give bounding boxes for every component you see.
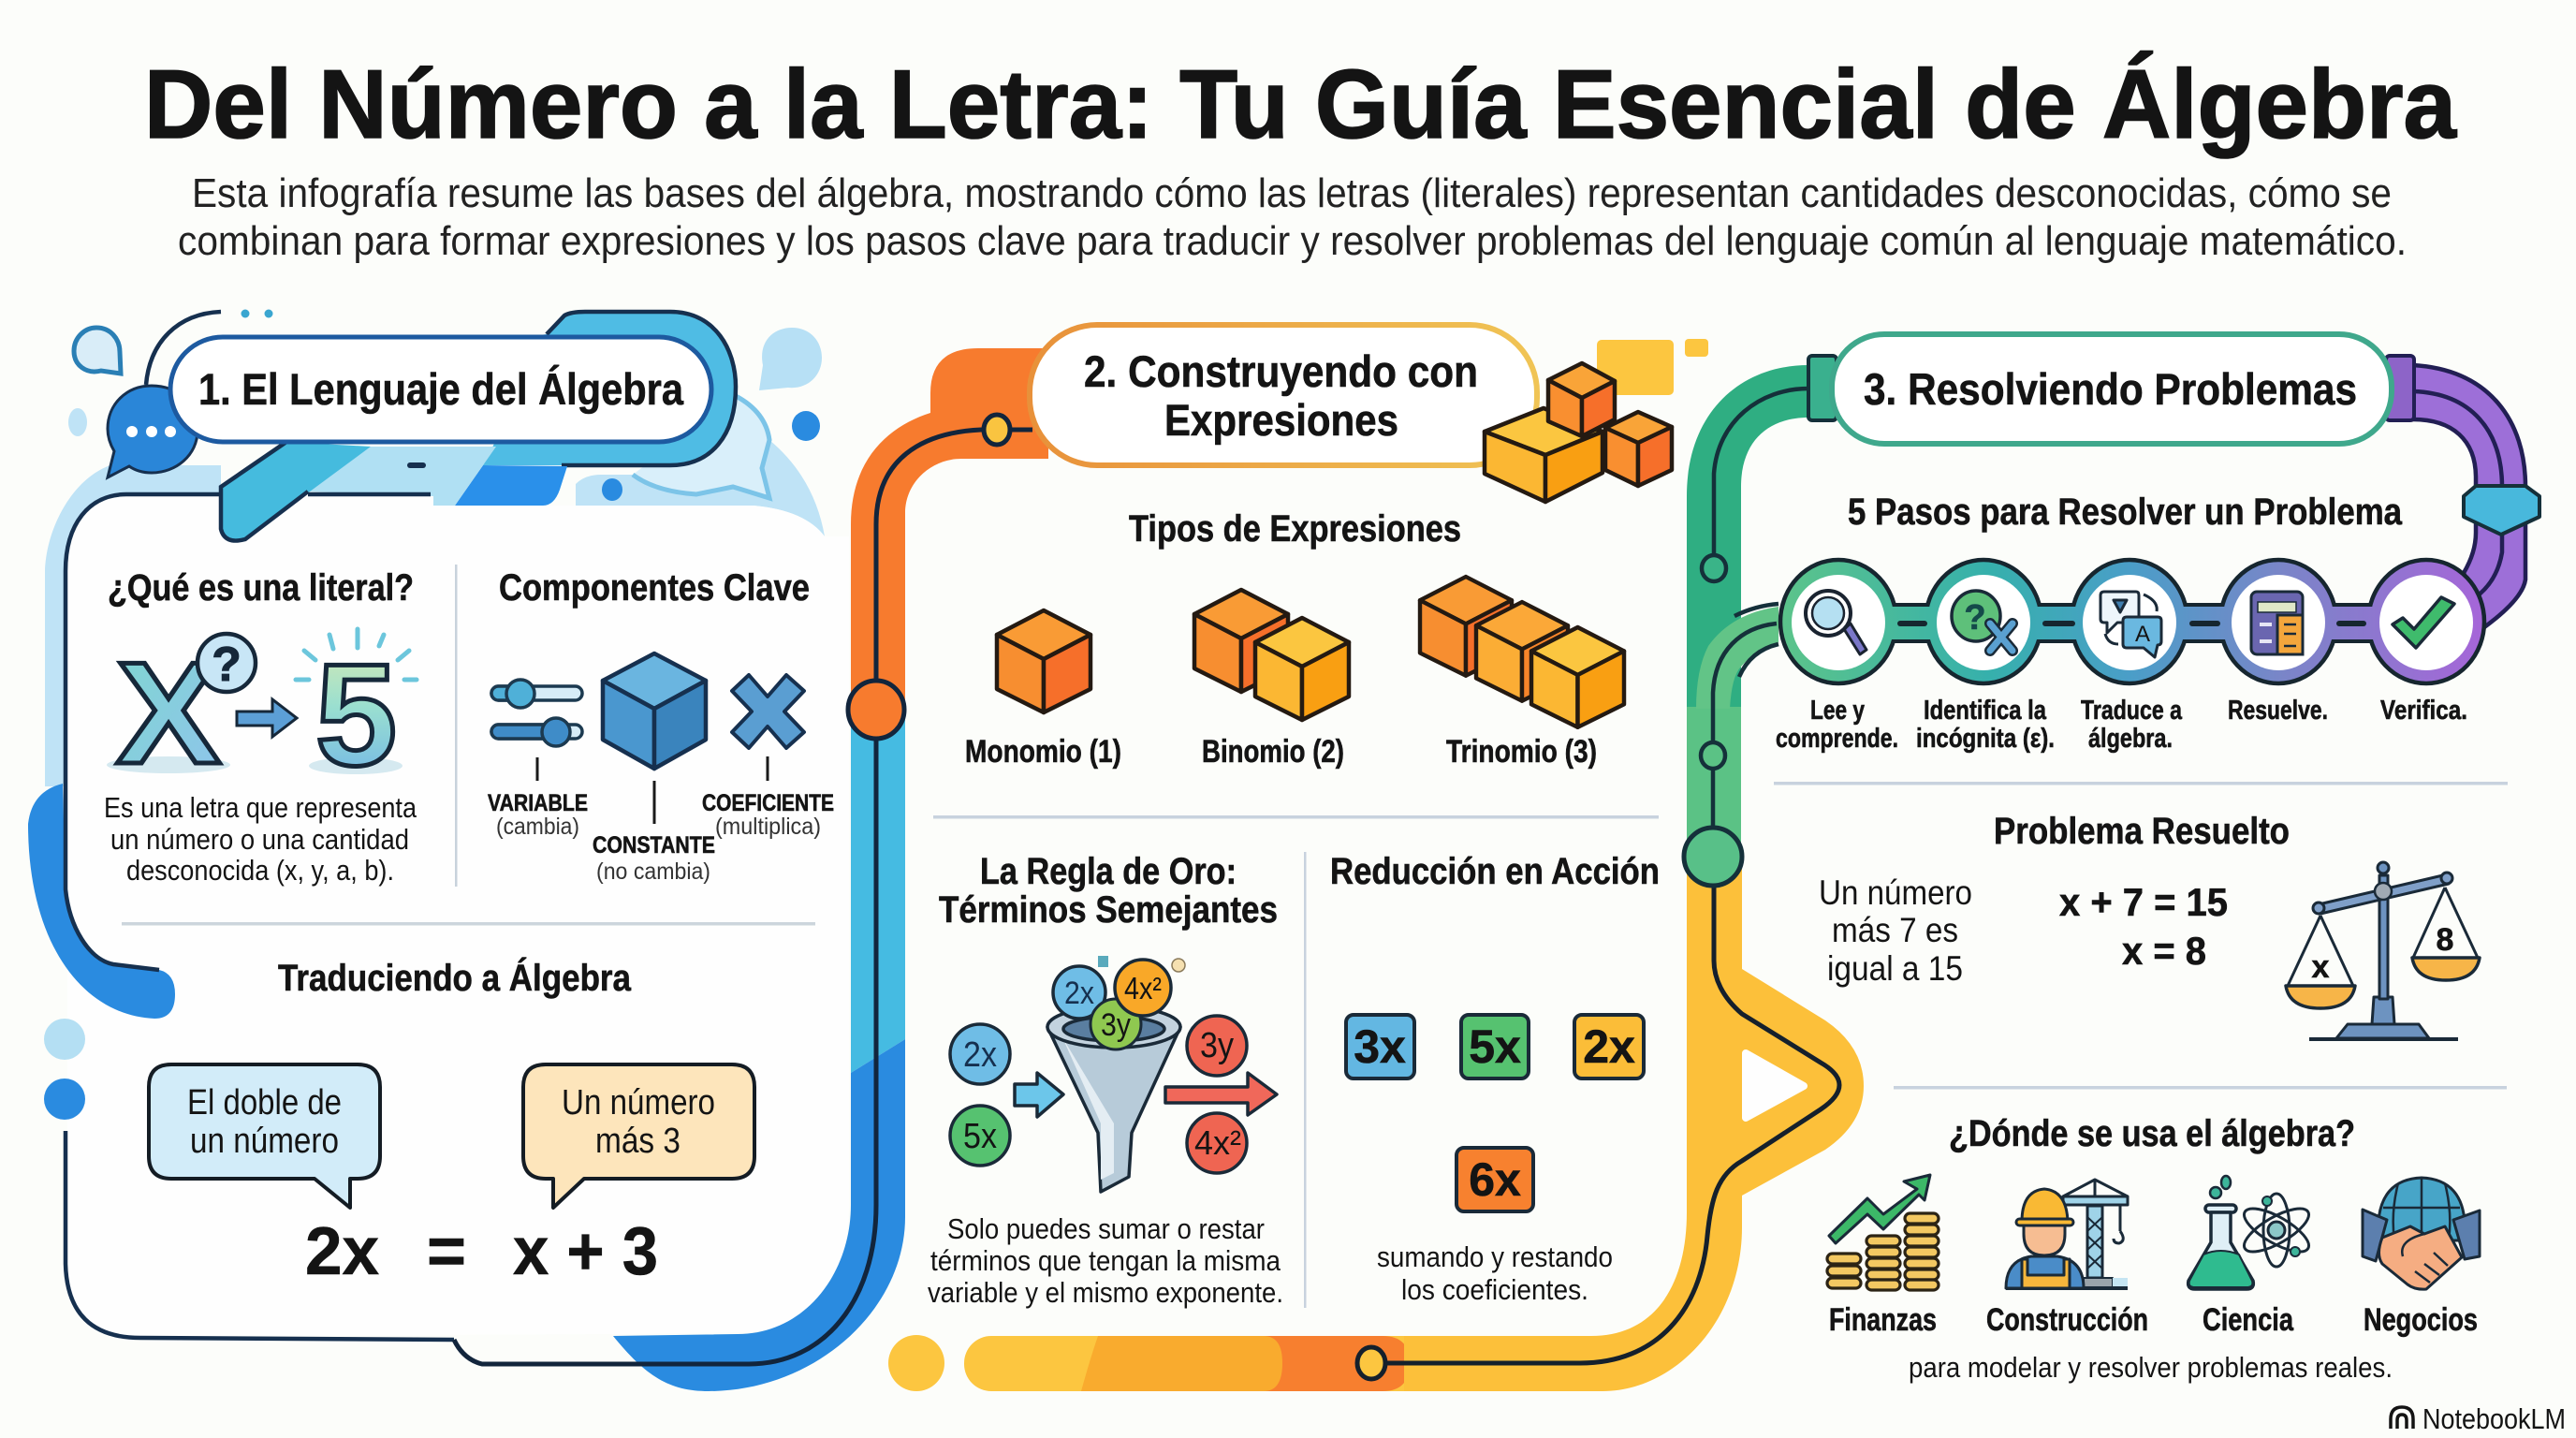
panel outline lower [66,1131,454,1340]
tile 3x: 3x [1354,1020,1406,1073]
tile 6x: 6x [1469,1153,1521,1206]
orange segment [851,348,1048,721]
right cap [2386,356,2414,420]
text: rule explanation [928,1212,1283,1309]
icon: globe handshake [2363,1178,2480,1289]
text: problem statement: más 7 es [1832,911,1958,949]
icon: check mark [2393,597,2454,648]
tile 2x [1574,1015,1644,1078]
illustration: x to 5: ? [212,638,242,692]
illustration: x to 5: X [116,632,221,794]
equation steps: x + 7 = 15 [2059,880,2228,924]
step 1 label [1776,696,1898,754]
speech bubble: doble [149,1064,380,1208]
small node [984,415,1010,445]
heading: cinco pasos: 5 Pasos para Resolver un Problema [1848,492,2403,533]
text: problem statement: Un número [1819,873,1972,912]
tile 3x [1346,1015,1414,1078]
term circle 5x: 5x [963,1117,997,1156]
equation: = [427,1214,466,1289]
text: definition of literal [104,791,417,887]
step 2 label: Identifica la [1924,696,2047,726]
text: definition of literal: desconocida (x, y, a, b). [126,854,394,887]
icon: finance coins [1827,1175,1939,1290]
term circle 3y [1187,1016,1247,1076]
heading: tipos: Tipos de Expresiones [1129,508,1461,550]
panel: resolviendo problemas [1774,334,2508,1384]
blue fold [455,465,567,506]
label: construccion: Construcción [1986,1302,2148,1338]
icon: science flask and atom [2188,1176,2315,1289]
text: rule explanation: variable y el mismo exponente. [928,1276,1283,1309]
step 2 label [1916,696,2055,754]
tile 5x [1461,1015,1529,1078]
label: coeficiente: COEFICIENTE [702,790,834,816]
label: ciencia: Ciencia [2203,1302,2294,1338]
icon: cube constant [603,653,706,769]
ring interiors [1792,575,2473,670]
connector fills [1872,607,2396,639]
step 5 label: Verifica. [2380,696,2467,726]
end dot [888,1335,944,1391]
icon: question and x: ? [1964,598,1986,638]
tile 5x: 5x [1469,1020,1521,1073]
label: variable: (cambia) [496,814,579,840]
step 4 label: Resuelve. [2228,696,2328,726]
heading: que es una literal: ¿Qué es una literal? [108,567,414,609]
step 3 label: álgebra. [2088,724,2173,754]
ribbon: yellow [888,857,1864,1391]
heading: componentes clave: Componentes Clave [499,567,810,609]
ribbon body [483,312,736,465]
label: binomio: Binomio (2) [1202,734,1344,770]
icon: translate bubbles: A [2135,622,2150,647]
speech bubble: mas 3: Un número [562,1083,715,1123]
text: problem statement: igual a 15 [1827,949,1963,988]
text: definition of literal: Es una letra que representa [104,791,417,824]
ribbon: orange to blue [454,348,1048,1391]
section heading pill: Expresiones [1164,395,1398,445]
lower node [1701,742,1725,769]
tail outline [221,442,308,541]
label: coeficiente: (multiplica) [715,814,821,840]
section heading pill [170,337,711,442]
icon: outline bubble right [633,396,769,498]
yellow centre line [1385,886,1839,1363]
term circle 4x2: 4x² [1194,1123,1241,1162]
clamp [2464,486,2539,535]
intro paragraph: combinan para formar expresiones y los pasos clave para traducir y resolver problemas del lenguaje común al lenguaje matemático. [178,218,2407,264]
icon: funnel [1047,1006,1180,1192]
decorative circles [44,1019,85,1120]
panel: el lenguaje del algebra [28,309,849,1340]
text: rule explanation: términos que tengan la misma [930,1244,1281,1277]
scale label 8: 8 [2437,922,2453,958]
illustration: x to 5 [107,629,417,796]
light cloud left [45,465,221,786]
scale label x: x [2312,949,2330,985]
small node [1357,1347,1385,1379]
intro paragraph: Esta infografía resume las bases del álgebra, mostrando cómo las letras (literales) representan cantidades desconocidas, cómo se [192,170,2392,216]
bar orange [1264,1336,1410,1391]
speech bubble: doble: un número [190,1122,339,1161]
label: finanzas: Finanzas [1829,1302,1937,1338]
icon: question and x [1952,591,2012,651]
connector bar [1838,605,2426,641]
step chain [1780,560,2484,683]
divider [1774,782,2508,785]
green trunk lower [1687,707,1741,858]
icon: monomio cube [997,610,1090,712]
label: constante: CONSTANTE [593,832,715,858]
header arc [146,312,221,385]
section heading pill [1832,334,2392,444]
illustration: x to 5: 5 [315,634,397,796]
ribbon: green [1684,356,1837,886]
term circle 2x [950,1024,1010,1084]
panel white fill [67,496,849,1336]
funnel balls: 3y [1101,1007,1131,1043]
light dot [68,408,87,436]
section heading pill [1030,325,1537,465]
light cloud right [576,440,825,536]
equation steps [2059,880,2228,973]
branch outline [1713,604,1778,742]
speech bubble: mas 3 [523,1064,754,1208]
light fold [308,447,496,506]
icon: calculator [2251,592,2303,654]
icon: construction worker [2006,1180,2128,1288]
purple pipe [2413,365,2525,627]
panel outline [66,494,221,970]
label: trinomio: Trinomio (3) [1446,734,1597,770]
header dots [242,309,273,318]
green lines [1713,389,1808,828]
tail [221,442,371,541]
step 3 label [2081,696,2183,754]
text: reduction note [1377,1240,1613,1306]
header ribbon [221,312,736,541]
text: reduction note: sumando y restando [1377,1240,1613,1273]
left cap [1808,356,1837,420]
arrow: out of funnel [1165,1073,1277,1115]
funnel balls [1053,956,1185,1049]
speech bubble: mas 3: más 3 [595,1122,681,1161]
cyan segment [851,712,905,1073]
label: constante: (no cambia) [596,858,710,885]
heading: reduccion: Reducción en Acción [1330,851,1660,892]
heading: donde se usa: ¿Dónde se usa el álgebra? [1949,1113,2355,1154]
large node [1684,828,1742,886]
decorative dots [602,411,820,501]
large node [848,681,904,739]
equation: 2x [305,1214,379,1289]
blue ribbon left [28,784,175,1019]
step 1 label: comprende. [1776,724,1898,754]
icon: binomio cubes [1194,590,1349,720]
blue segment [613,1039,905,1391]
label: variable [488,790,588,840]
panel: construyendo con expresiones [928,325,1708,1309]
speech bubble: doble: El doble de [187,1083,342,1123]
vertical divider [455,565,457,887]
vertical divider [1304,852,1307,1308]
term circle 5x [950,1106,1010,1166]
text: reduction note: los coeficientes. [1401,1273,1588,1306]
step 3 label: Traduce a [2081,696,2183,726]
arrow: into funnel [1015,1073,1063,1117]
label: coeficiente [702,790,834,840]
icon: sliders [491,680,582,746]
pipe centre [2413,391,2502,596]
decorative squares [1597,339,1708,395]
divider [122,922,815,925]
label: monomio: Monomio (1) [965,734,1121,770]
heading: traduciendo: Traduciendo a Álgebra [278,957,632,999]
connector dashes [1900,621,2364,626]
ribbon: purple [2386,356,2539,627]
term circle 3y: 3y [1200,1026,1234,1065]
panel top line right [308,492,431,496]
section heading pill: 1. El Lenguaje del Álgebra [198,364,684,414]
text: rule explanation: Solo puedes sumar o restar [947,1212,1265,1245]
icon: multiply cross [732,675,804,748]
funnel balls: 4x² [1124,971,1162,1005]
step 1 label: Lee y [1810,696,1865,726]
bar mid [1081,1336,1282,1391]
section heading pill: 3. Resolviendo Problemas [1864,364,2357,414]
upper node [1702,555,1726,581]
equation: x + 3 [513,1214,658,1289]
text: definition of literal: un número o una cantidad [110,823,409,856]
equation [305,1214,658,1289]
tile 6x [1456,1148,1533,1211]
heading: regla de oro: Términos Semejantes [939,889,1278,931]
step 2 label: incógnita (ε). [1916,724,2055,754]
icon: translate bubbles [2100,592,2161,657]
icon: light bubble right [759,328,822,390]
funnel balls: 2x [1064,976,1094,1011]
bar light [964,1336,1432,1391]
label: constante [593,832,715,885]
small dash [407,462,426,468]
term circle 2x: 2x [963,1035,997,1075]
icon: magnifier [1806,591,1866,654]
green branch [1696,607,1778,709]
icon: chat bubble [108,386,198,477]
heading: regla de oro [939,851,1278,931]
white triangle notch [1746,1053,1804,1118]
rings [1780,560,2484,683]
ribbon outline [547,312,736,465]
component leader lines [537,756,768,824]
icon: trinomio cubes [1420,577,1624,727]
heading: problema resuelto: Problema Resuelto [1994,811,2290,852]
label: variable: VARIABLE [488,790,588,816]
equation steps: x = 8 [2122,929,2206,973]
icon: stacked cubes [1485,363,1672,502]
divider [1894,1086,2507,1090]
icon: small outline bubble [74,328,121,374]
tile 2x: 2x [1583,1020,1635,1073]
intro paragraph [178,170,2407,264]
text: problem statement [1819,873,1972,988]
centre line [454,430,1032,1364]
label: negocios: Negocios [2364,1302,2478,1338]
title: Del Número a la Letra: Tu Guía Esencial de Álgebra [144,51,2457,159]
term circle 4x2 [1187,1113,1247,1173]
divider [933,815,1659,818]
yellow band with bump [1404,857,1864,1391]
section heading pill: 2. Construyendo con [1084,346,1478,396]
green trunk [1687,365,1808,712]
heading: regla de oro: La Regla de Oro: [980,851,1237,892]
icon: balance scale [2286,862,2480,1039]
text: closing note: para modelar y resolver problemas reales. [1909,1351,2393,1384]
